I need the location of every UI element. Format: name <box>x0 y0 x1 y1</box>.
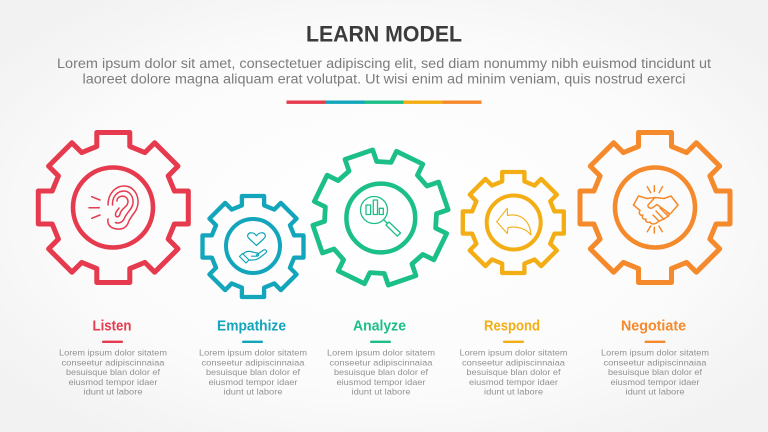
column: respond: eiusmod tempor idaer <box>469 377 558 387</box>
column: negotiate <box>601 318 709 397</box>
column: analyze: conseetur adipiscinnaiaa <box>330 357 433 367</box>
icon: reply arrow <box>497 208 531 235</box>
column: empathize: conseetur adipiscinnaiaa <box>202 357 305 367</box>
icon: ear <box>89 186 138 229</box>
icon: magnifier with bars <box>360 196 400 236</box>
column: analyze: idunt ut labore <box>352 387 411 397</box>
gear: empathize <box>202 196 304 297</box>
column: empathize: besuisque blan dolor ef <box>206 367 301 377</box>
column: listen: Listen <box>92 318 132 334</box>
column: negotiate: conseetur adipiscinnaiaa <box>604 357 707 367</box>
column: listen: conseetur adipiscinnaiaa <box>62 357 165 367</box>
column: respond: Lorem ipsum dolor sitatem <box>460 348 568 358</box>
intro text <box>57 56 711 86</box>
gear: listen <box>38 132 188 282</box>
intro text: Lorem ipsum dolor sit amet, consectetuer adipiscing elit, sed diam nonummy nibh euismod tincidunt ut <box>57 56 711 71</box>
column: empathize: eiusmod tempor idaer <box>208 377 298 387</box>
column: listen: eiusmod tempor idaer <box>68 377 158 387</box>
column: listen <box>59 318 167 397</box>
column: listen: idunt ut labore <box>84 387 143 397</box>
intro text: laoreet dolore magna aliquam erat volutpat. Ut wisi enim ad minim veniam, quis nostrud exerci <box>82 72 686 86</box>
gear: analyze <box>292 129 469 306</box>
gear: negotiate <box>580 132 730 282</box>
column: analyze: Analyze <box>353 318 406 334</box>
column: empathize: Empathize <box>217 318 286 334</box>
column: analyze: besuisque blan dolor ef <box>334 367 429 377</box>
column: respond: conseetur adipiscinnaiaa <box>462 357 565 367</box>
column: negotiate: Lorem ipsum dolor sitatem <box>601 348 709 358</box>
column: negotiate: eiusmod tempor idaer <box>610 377 700 387</box>
icon: heart in hand <box>240 233 266 263</box>
icon: handshake <box>634 186 678 233</box>
column: negotiate: Negotiate <box>621 318 686 334</box>
column: negotiate: besuisque blan dolor ef <box>608 367 703 377</box>
column: empathize <box>199 318 307 397</box>
column: listen: besuisque blan dolor ef <box>66 367 161 377</box>
column: analyze: Lorem ipsum dolor sitatem <box>327 348 435 358</box>
gear: respond <box>463 172 564 273</box>
column: analyze <box>327 318 435 397</box>
column: respond: besuisque blan dolor ef <box>466 367 561 377</box>
column: listen: Lorem ipsum dolor sitatem <box>59 348 167 358</box>
column: respond: Respond <box>484 318 540 334</box>
title: LEARN MODEL <box>306 22 462 47</box>
column: empathize: idunt ut labore <box>224 387 283 397</box>
column: empathize: Lorem ipsum dolor sitatem <box>199 348 307 358</box>
column: analyze: eiusmod tempor idaer <box>336 377 426 387</box>
column: negotiate: idunt ut labore <box>626 387 685 397</box>
column: respond: idunt ut labore <box>484 387 543 397</box>
column: respond <box>460 318 568 397</box>
rainbow divider bar <box>286 100 482 104</box>
